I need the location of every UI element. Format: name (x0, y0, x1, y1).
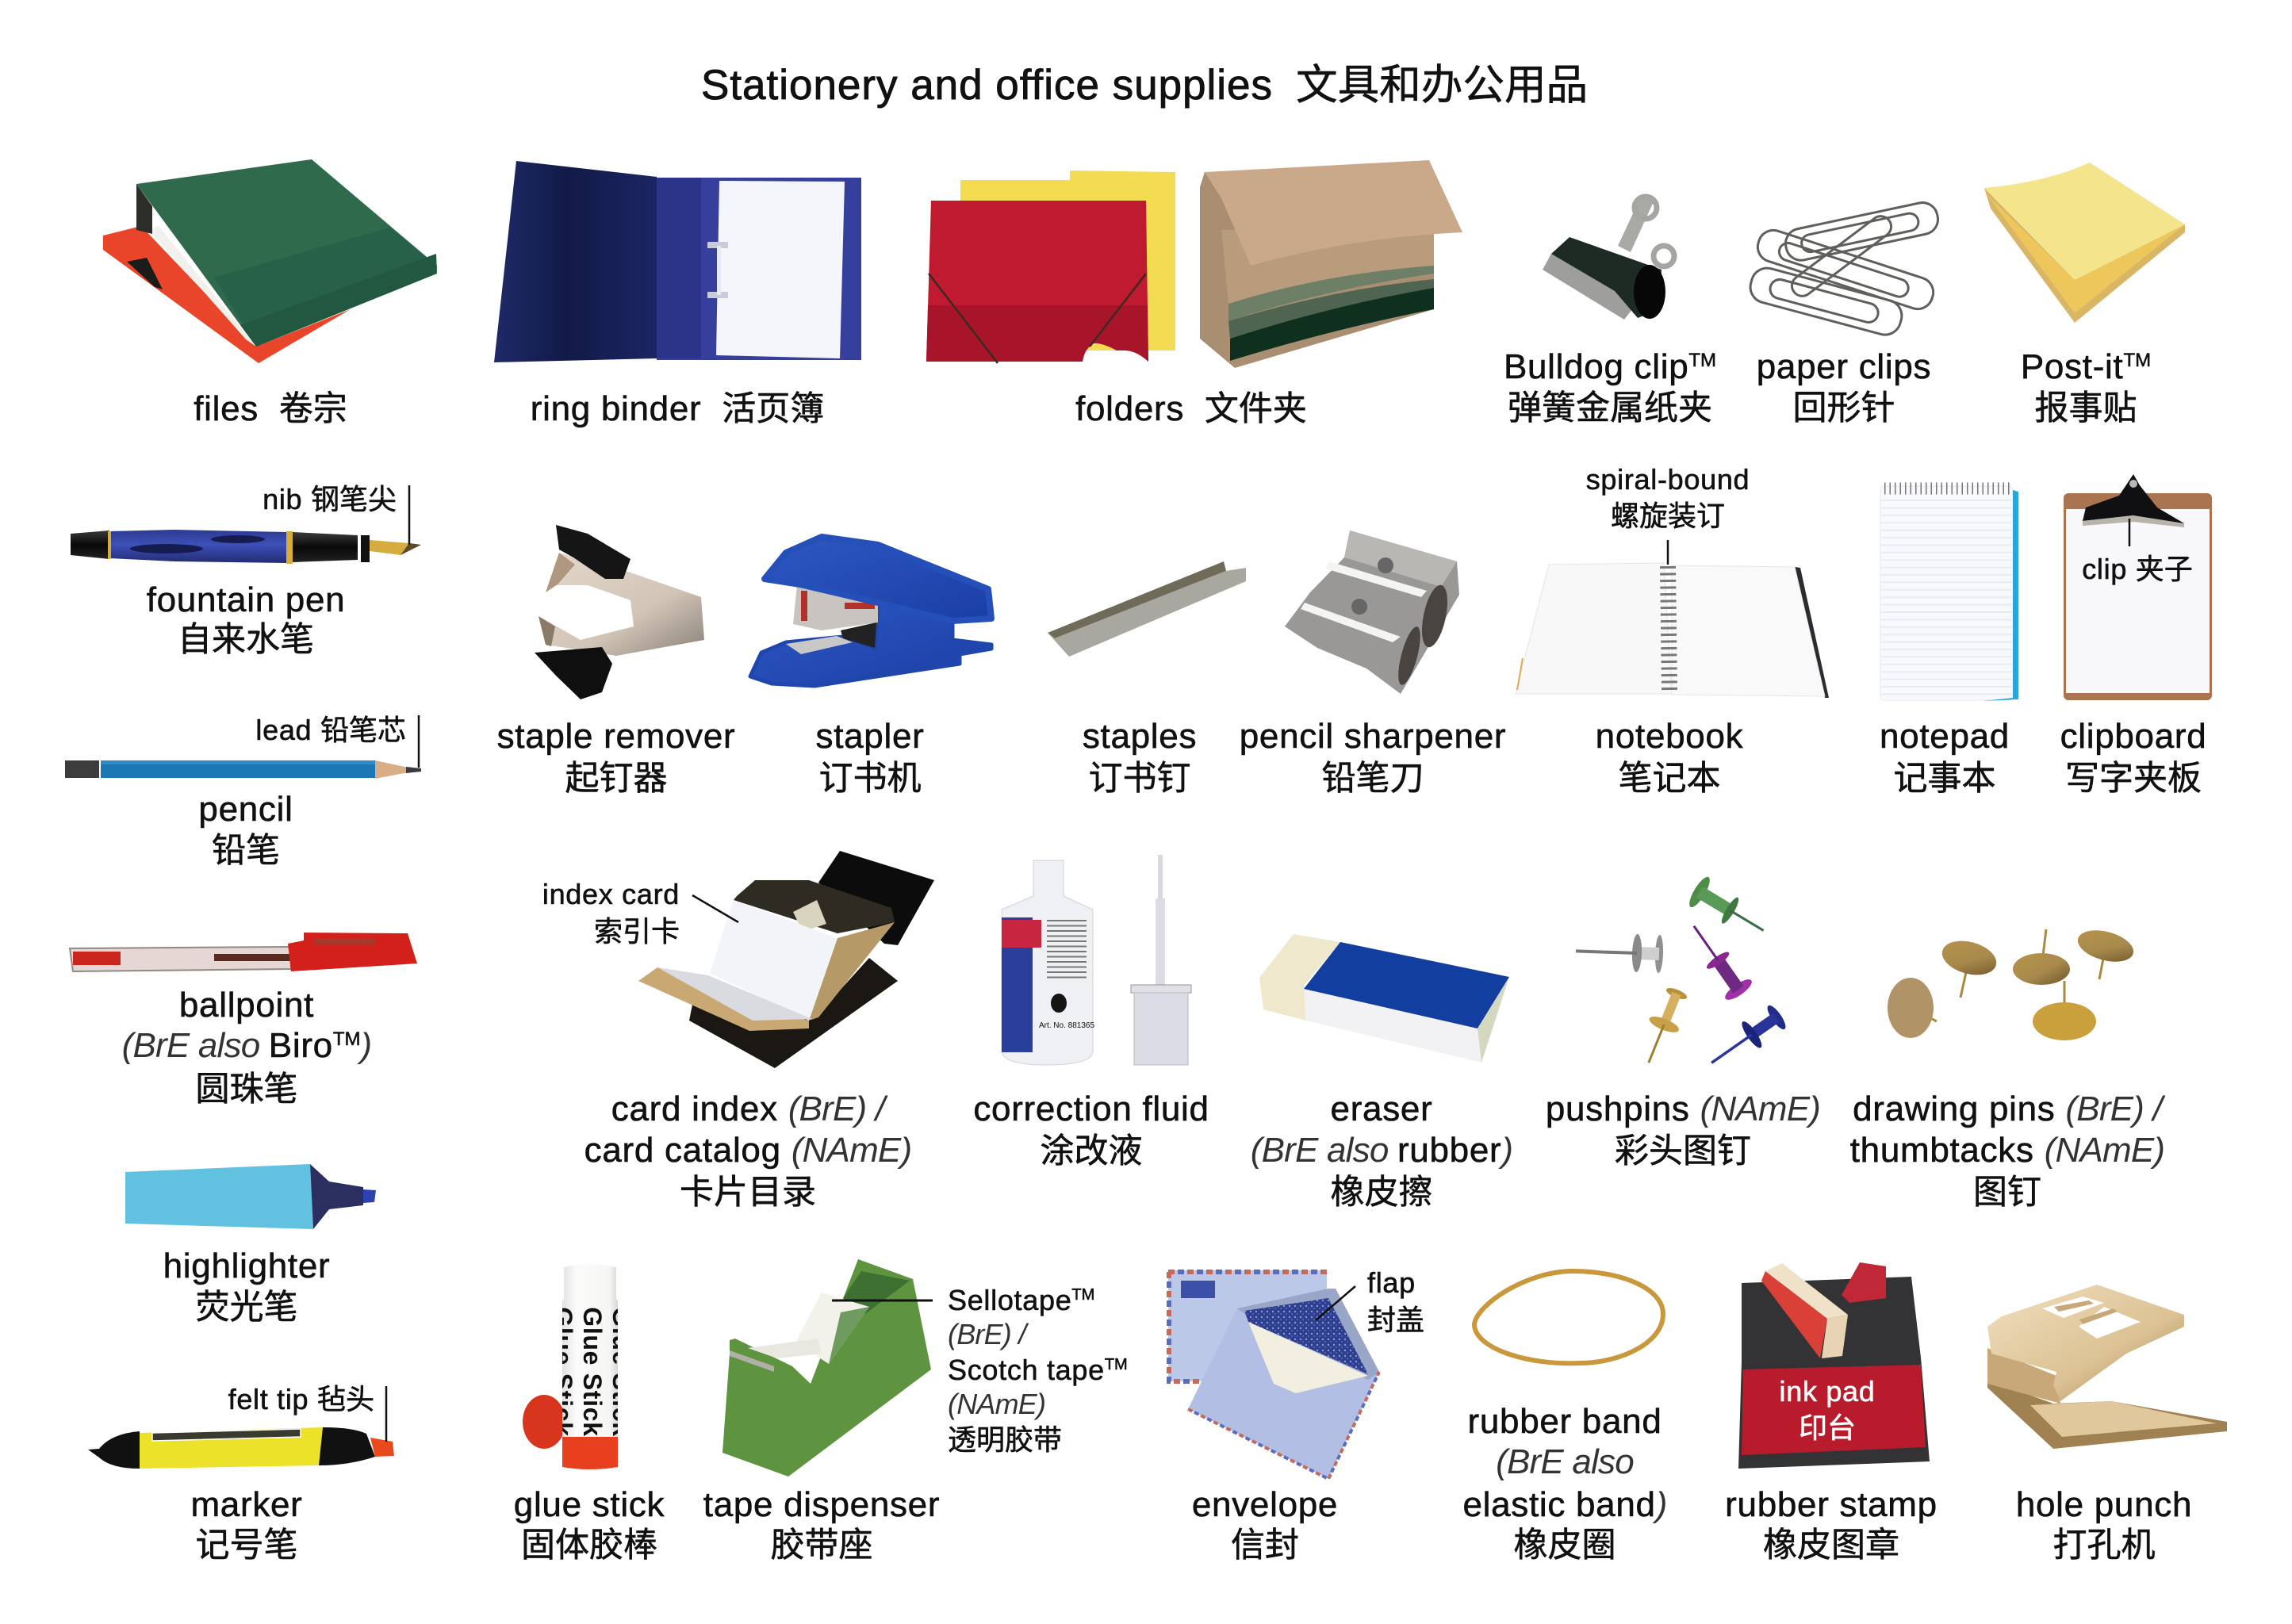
label: Bulldog clip: TM (1688, 350, 1716, 371)
icon: brown expanding folder (1200, 160, 1462, 368)
label: staple remover (497, 717, 735, 798)
callout: felt tip: felt tip 毡头 (228, 1383, 374, 1415)
item: clipboard (2060, 474, 2212, 798)
title: Stationery and office supplies (701, 62, 1272, 109)
label: ballpoint: ballpoint (179, 986, 314, 1025)
icon: spiral notebook (1516, 563, 1829, 698)
item: rubber stamp (1725, 1262, 1937, 1565)
icon: paper clips (1747, 200, 1941, 339)
icon: red folder (926, 201, 1148, 363)
icon: glue stick: Glue Stick (607, 1307, 636, 1437)
icon: envelope back (1168, 1270, 1327, 1381)
callout: flap (1316, 1266, 1424, 1336)
item: Post-it (1984, 163, 2185, 427)
label: notebook (1596, 717, 1744, 798)
label: staples: 订书钉 (1088, 760, 1191, 798)
label: paper clips: 回形针 (1792, 389, 1895, 427)
label: staple remover: staple remover (497, 717, 735, 756)
icon: fountain pen (71, 530, 421, 564)
item: notebook (1516, 463, 1829, 798)
item: files (103, 159, 437, 428)
callout: spiral-bound (1586, 463, 1750, 565)
callout: ink pad (1780, 1375, 1875, 1444)
icon: pushpins (1575, 875, 1789, 1076)
label: Post-it: TM (2123, 350, 2151, 371)
label: marker (190, 1485, 303, 1565)
label: stapler: 订书机 (818, 760, 922, 798)
item: Bulldog clip (1504, 197, 1716, 427)
icon: rubber band (1474, 1271, 1663, 1363)
item: envelope (1168, 1266, 1424, 1565)
label: rubber band: (BrE also (1496, 1442, 1634, 1481)
label: Bulldog clip: Bulldog clip (1504, 347, 1688, 386)
icon: post-it pad (1984, 163, 2185, 323)
item: pushpins (1546, 875, 1820, 1170)
icon: pencil sharpener (1285, 530, 1459, 694)
callout: lead: lead 铅笔芯 (255, 714, 406, 746)
label: tape dispenser: tape dispenser (703, 1485, 940, 1524)
label: notepad: 记事本 (1894, 760, 1995, 798)
label: stapler (816, 717, 924, 798)
label: paper clips (1757, 347, 1931, 427)
label: correction fluid: correction fluid (973, 1090, 1209, 1128)
label: fountain pen: 自来水笔 (178, 621, 314, 659)
callout: nib: nib 钢笔尖 (263, 483, 397, 515)
icon: ink pad (1738, 1277, 1930, 1469)
label: drawing pins (1850, 1090, 2165, 1212)
callout: Sellotape / Scotch tape: Sellotape (948, 1284, 1071, 1316)
icon: correction fluid bottle (1002, 860, 1094, 1065)
title (701, 62, 1588, 109)
label: pencil sharpener: pencil sharpener (1240, 717, 1506, 756)
label: eraser (1251, 1090, 1512, 1212)
icon: staple remover (535, 525, 704, 699)
label: eraser: eraser (1331, 1090, 1432, 1128)
label: files: files 卷宗 (194, 389, 347, 428)
item: folders (926, 160, 1462, 428)
label: Post-it: 报事贴 (2035, 389, 2137, 427)
label: envelope: 信封 (1231, 1526, 1299, 1565)
label: rubber stamp: 橡皮图章 (1763, 1526, 1899, 1565)
label: glue stick (514, 1485, 665, 1565)
label: ring binder: ring binder 活页簿 (531, 389, 824, 428)
label: ballpoint: (BrE also Biro (122, 1026, 333, 1065)
item: staple remover (497, 525, 735, 798)
label: rubber stamp: rubber stamp (1725, 1485, 1937, 1524)
label: Post-it: Post-it (2021, 347, 2123, 386)
label: staple remover: 起钉器 (565, 760, 668, 798)
callout: index card: index card (542, 878, 680, 910)
item: pencil sharpener (1240, 530, 1506, 798)
label: correction fluid (973, 1090, 1209, 1170)
label: drawing pins: 图钉 (1973, 1174, 2041, 1212)
icon: yellow folder (960, 170, 1175, 350)
item: card index (542, 851, 934, 1212)
label: ballpoint: ) (357, 1026, 371, 1065)
label: ballpoint (122, 986, 371, 1109)
icon: card index box (638, 851, 934, 1068)
item: highlighter (125, 1164, 376, 1327)
label: marker: marker (190, 1485, 303, 1524)
callout: spiral-bound: 螺旋装订 (1611, 500, 1725, 532)
item: stapler (750, 537, 991, 798)
label: clipboard: 写字夹板 (2065, 760, 2202, 798)
callout: Sellotape / Scotch tape: TM (1071, 1286, 1094, 1304)
label: highlighter (163, 1247, 330, 1327)
icon: glue stick: Glue Stick (578, 1307, 607, 1437)
item: marker (88, 1383, 394, 1565)
icon: eraser (1259, 934, 1509, 1063)
icon: notepad (1880, 486, 2018, 701)
callout: ink pad: ink pad (1780, 1375, 1875, 1408)
label: notepad (1880, 717, 2010, 798)
label: drawing pins: thumbtacks (NAmE) (1850, 1131, 2164, 1170)
callout: ink pad: 印台 (1799, 1411, 1856, 1444)
icon: ballpoint pen (70, 933, 417, 971)
callout: Sellotape / Scotch tape: 透明胶带 (948, 1423, 1062, 1456)
item: fountain pen (71, 483, 421, 659)
label: pushpins: 彩头图钉 (1615, 1132, 1751, 1170)
label: highlighter: highlighter (163, 1247, 330, 1285)
icon: correction fluid bottle: Art. No. 881365 (1039, 1021, 1094, 1030)
label: pencil sharpener (1240, 717, 1506, 798)
label: ballpoint: 圆珠笔 (195, 1071, 298, 1109)
label: fountain pen: fountain pen (147, 580, 345, 619)
label: notebook: notebook (1596, 717, 1744, 756)
label: fountain pen (147, 580, 345, 659)
callout: flap: flap (1367, 1266, 1416, 1299)
label: pushpins: pushpins (NAmE) (1546, 1090, 1820, 1128)
icon: hole punch (1987, 1285, 2227, 1449)
label: notepad: notepad (1880, 717, 2010, 756)
label: Post-it (2021, 347, 2151, 427)
label: staples: staples (1083, 717, 1197, 756)
label: ballpoint: TM (333, 1028, 361, 1050)
label: Bulldog clip (1504, 347, 1716, 427)
icon: green and red binders (103, 159, 437, 363)
item: notepad (1880, 486, 2018, 798)
icon: glue stick: Glue Stick (549, 1307, 577, 1437)
item: rubber band (1462, 1271, 1667, 1565)
icon: bulldog clip (1543, 197, 1674, 320)
icon: highlighter (125, 1164, 376, 1229)
label: tape dispenser: 胶带座 (771, 1526, 872, 1565)
label: pencil (198, 790, 293, 870)
label: card index: card index (BrE) / (611, 1090, 888, 1128)
item: hole punch (1987, 1285, 2227, 1565)
item: drawing pins (1850, 925, 2165, 1212)
label: pushpins (1546, 1090, 1820, 1170)
label: eraser: (BrE also rubber) (1251, 1131, 1512, 1170)
label: hole punch: hole punch (2016, 1485, 2192, 1524)
icon: correction fluid brush (1131, 855, 1191, 1065)
icon: envelope front (1188, 1289, 1379, 1479)
label: pencil: pencil (198, 790, 293, 829)
callout: flap: 封盖 (1367, 1304, 1424, 1336)
label: rubber band: rubber band (1467, 1402, 1662, 1441)
label: rubber band: 橡皮圈 (1513, 1526, 1616, 1565)
label: clipboard: clipboard (2060, 717, 2206, 756)
item: glue stick (514, 1264, 665, 1565)
icon: stapler (750, 537, 991, 686)
callout: Sellotape / Scotch tape: (NAmE) (948, 1388, 1045, 1420)
label: paper clips: paper clips (1757, 347, 1931, 386)
label: pencil sharpener: 铅笔刀 (1321, 760, 1424, 798)
callout: clip (2082, 519, 2193, 585)
title: 文具和办公用品 (1296, 62, 1588, 109)
label: hole punch: 打孔机 (2052, 1526, 2156, 1565)
callout: Sellotape / Scotch tape: Scotch tape (948, 1354, 1105, 1386)
icon: ring binder (494, 161, 861, 362)
callout: Sellotape / Scotch tape: TM (1105, 1356, 1128, 1373)
icon: marker (88, 1427, 394, 1469)
label: card index: 卡片目录 (680, 1174, 816, 1212)
item: ring binder (494, 161, 861, 428)
label: stapler: stapler (816, 717, 924, 756)
label: rubber stamp (1725, 1485, 1937, 1565)
label: drawing pins: drawing pins (BrE) / (1853, 1090, 2165, 1128)
label: pencil: 铅笔 (212, 832, 280, 870)
label: tape dispenser (703, 1485, 940, 1565)
label: highlighter: 荧光笔 (195, 1289, 298, 1327)
label: staples (1083, 717, 1197, 798)
icon: staples (1048, 561, 1246, 657)
callout: index card: 索引卡 (594, 915, 680, 948)
label: Bulldog clip: 弹簧金属纸夹 (1508, 389, 1712, 427)
label: card index (584, 1090, 911, 1212)
item: staples (1048, 561, 1246, 798)
callout: spiral-bound: spiral-bound (1586, 463, 1750, 496)
label: eraser: 橡皮擦 (1331, 1174, 1432, 1212)
label: card index: card catalog (NAmE) (584, 1131, 911, 1170)
icon: tape dispenser (722, 1259, 931, 1477)
callout: Sellotape / Scotch tape (832, 1284, 1128, 1456)
icon: glue stick (523, 1264, 618, 1469)
label: glue stick: 固体胶棒 (521, 1526, 657, 1565)
callout: clip: clip 夹子 (2082, 553, 2193, 585)
label: folders: folders 文件夹 (1075, 389, 1307, 428)
icon: clipboard (2064, 474, 2212, 700)
label: glue stick: glue stick (514, 1485, 665, 1524)
icon: pencil (65, 760, 421, 779)
callout: index card (542, 878, 738, 948)
item: paper clips (1747, 200, 1941, 427)
label: envelope: envelope (1192, 1485, 1338, 1524)
label: clipboard (2060, 717, 2206, 798)
item: correction fluid (973, 855, 1209, 1170)
label: marker: 记号笔 (195, 1526, 298, 1565)
callout: Sellotape / Scotch tape: (BrE) / (948, 1318, 1029, 1350)
item: eraser (1251, 934, 1512, 1212)
label: rubber band (1462, 1402, 1667, 1565)
item: tape dispenser (703, 1259, 1128, 1565)
item: pencil (65, 714, 421, 870)
label: correction fluid: 涂改液 (1041, 1132, 1142, 1170)
item: ballpoint (70, 933, 417, 1109)
label: envelope (1192, 1485, 1338, 1565)
label: rubber band: elastic band) (1462, 1485, 1667, 1524)
label: hole punch (2016, 1485, 2192, 1565)
label: notebook: 笔记本 (1618, 760, 1721, 798)
icon: stamp (1761, 1262, 1886, 1358)
icon: drawing pins (1888, 925, 2137, 1040)
